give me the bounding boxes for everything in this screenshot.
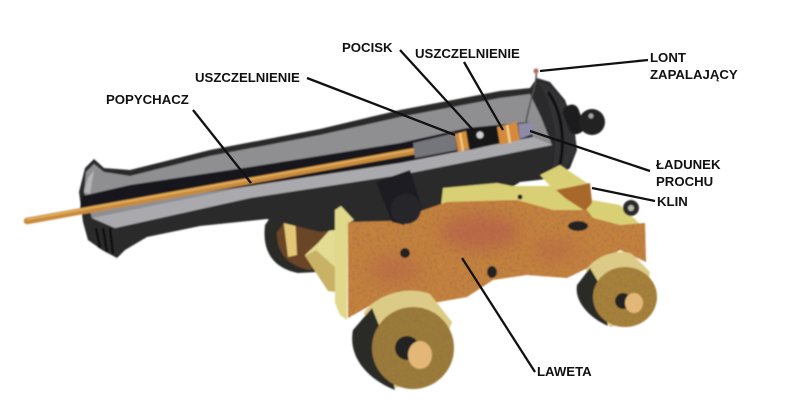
- leader line: popychacz: [193, 110, 251, 183]
- trunnion: [376, 170, 422, 225]
- cannon illustration: [27, 68, 657, 390]
- cascabel knob: [561, 103, 605, 136]
- label: uszczelnienie left: USZCZELNIENIE: [195, 70, 300, 85]
- breech rim: [538, 82, 576, 176]
- bolts: [400, 248, 410, 258]
- carriage side: [348, 200, 646, 318]
- muzzle rings: [96, 228, 113, 254]
- fuse: [526, 71, 536, 122]
- wadding one: [455, 131, 469, 152]
- leader line: laweta: [462, 258, 535, 372]
- powder charge: [518, 122, 535, 139]
- rear wheel right: [577, 252, 657, 327]
- label: uszczelnienie right: USZCZELNIENIE: [415, 46, 520, 61]
- rammer rod: [27, 150, 415, 221]
- label: popychacz: POPYCHACZ: [106, 92, 189, 107]
- leader line: ladunek: [530, 131, 650, 171]
- rear wheel left: [264, 214, 338, 273]
- label: pocisk: POCISK: [342, 40, 393, 55]
- front wheel: [352, 291, 454, 390]
- leader line: klin: [592, 188, 655, 201]
- label: ladunek prochu: ŁADUNEK: [656, 157, 721, 172]
- barrel outer dark: [79, 78, 577, 258]
- wood mottling: [440, 214, 520, 250]
- barrel gray section: [84, 94, 552, 228]
- label: lont zapalajacy: LONT: [650, 50, 686, 65]
- leader line: pocisk: [400, 50, 473, 130]
- cannon barrel: [79, 68, 605, 258]
- label: ladunek prochu: PROCHU: [656, 174, 713, 189]
- rammer head: [413, 133, 457, 158]
- ring bolt: [623, 200, 639, 216]
- carriage top steps: [440, 165, 640, 230]
- leader line: uszczelnienie left: [307, 78, 455, 135]
- leader line: uszczelnienie right: [464, 62, 503, 130]
- label: klin: KLIN: [657, 194, 688, 209]
- wadding two: [497, 122, 520, 145]
- carriage front face: [335, 206, 354, 320]
- label: laweta: LAWETA: [537, 364, 592, 379]
- label: lont zapalajacy: ZAPALAJĄCY: [650, 67, 738, 82]
- ball: [468, 125, 500, 150]
- leader line: lont: [540, 60, 648, 71]
- bore interior: [80, 122, 533, 209]
- axle block: [305, 223, 336, 292]
